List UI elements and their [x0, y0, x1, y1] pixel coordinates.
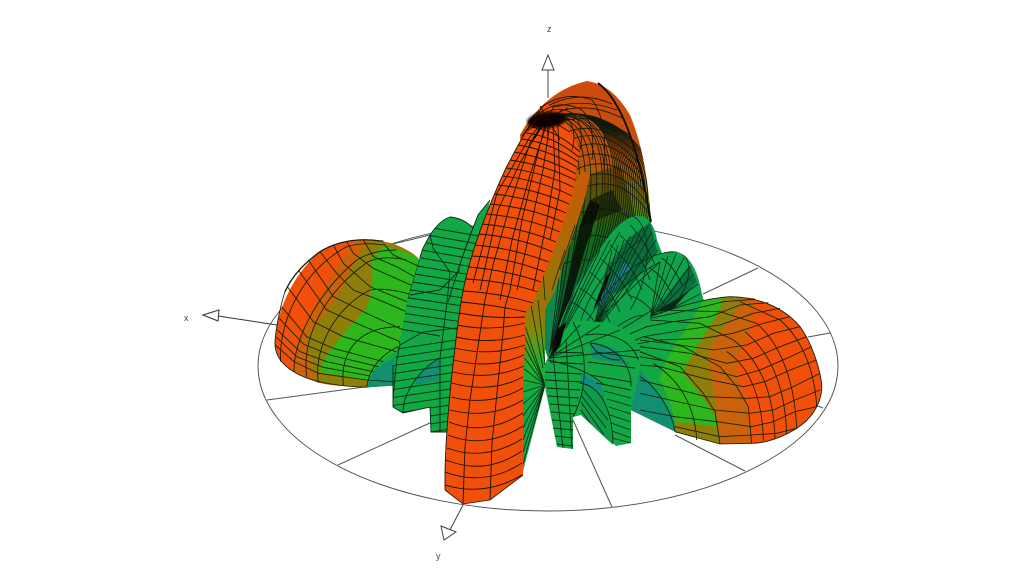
main lobe: back of arch [520, 81, 656, 362]
polar grid circle with spokes [258, 221, 838, 511]
x axis arrow [203, 310, 277, 325]
main lobe: wedge beside face [522, 170, 590, 475]
z axis label: z [547, 24, 552, 34]
central petals [543, 320, 640, 449]
right lobe [600, 297, 822, 444]
z axis arrow [542, 55, 554, 98]
main lobe: orange front face with mesh [445, 104, 580, 504]
left petals [390, 200, 490, 438]
x axis label: x [184, 313, 189, 323]
main lobe: dense mesh crown [522, 96, 605, 170]
y axis arrow [441, 505, 463, 540]
right petals behind right lobe [551, 216, 704, 350]
left lobe [275, 240, 430, 387]
y axis label: y [436, 551, 441, 561]
